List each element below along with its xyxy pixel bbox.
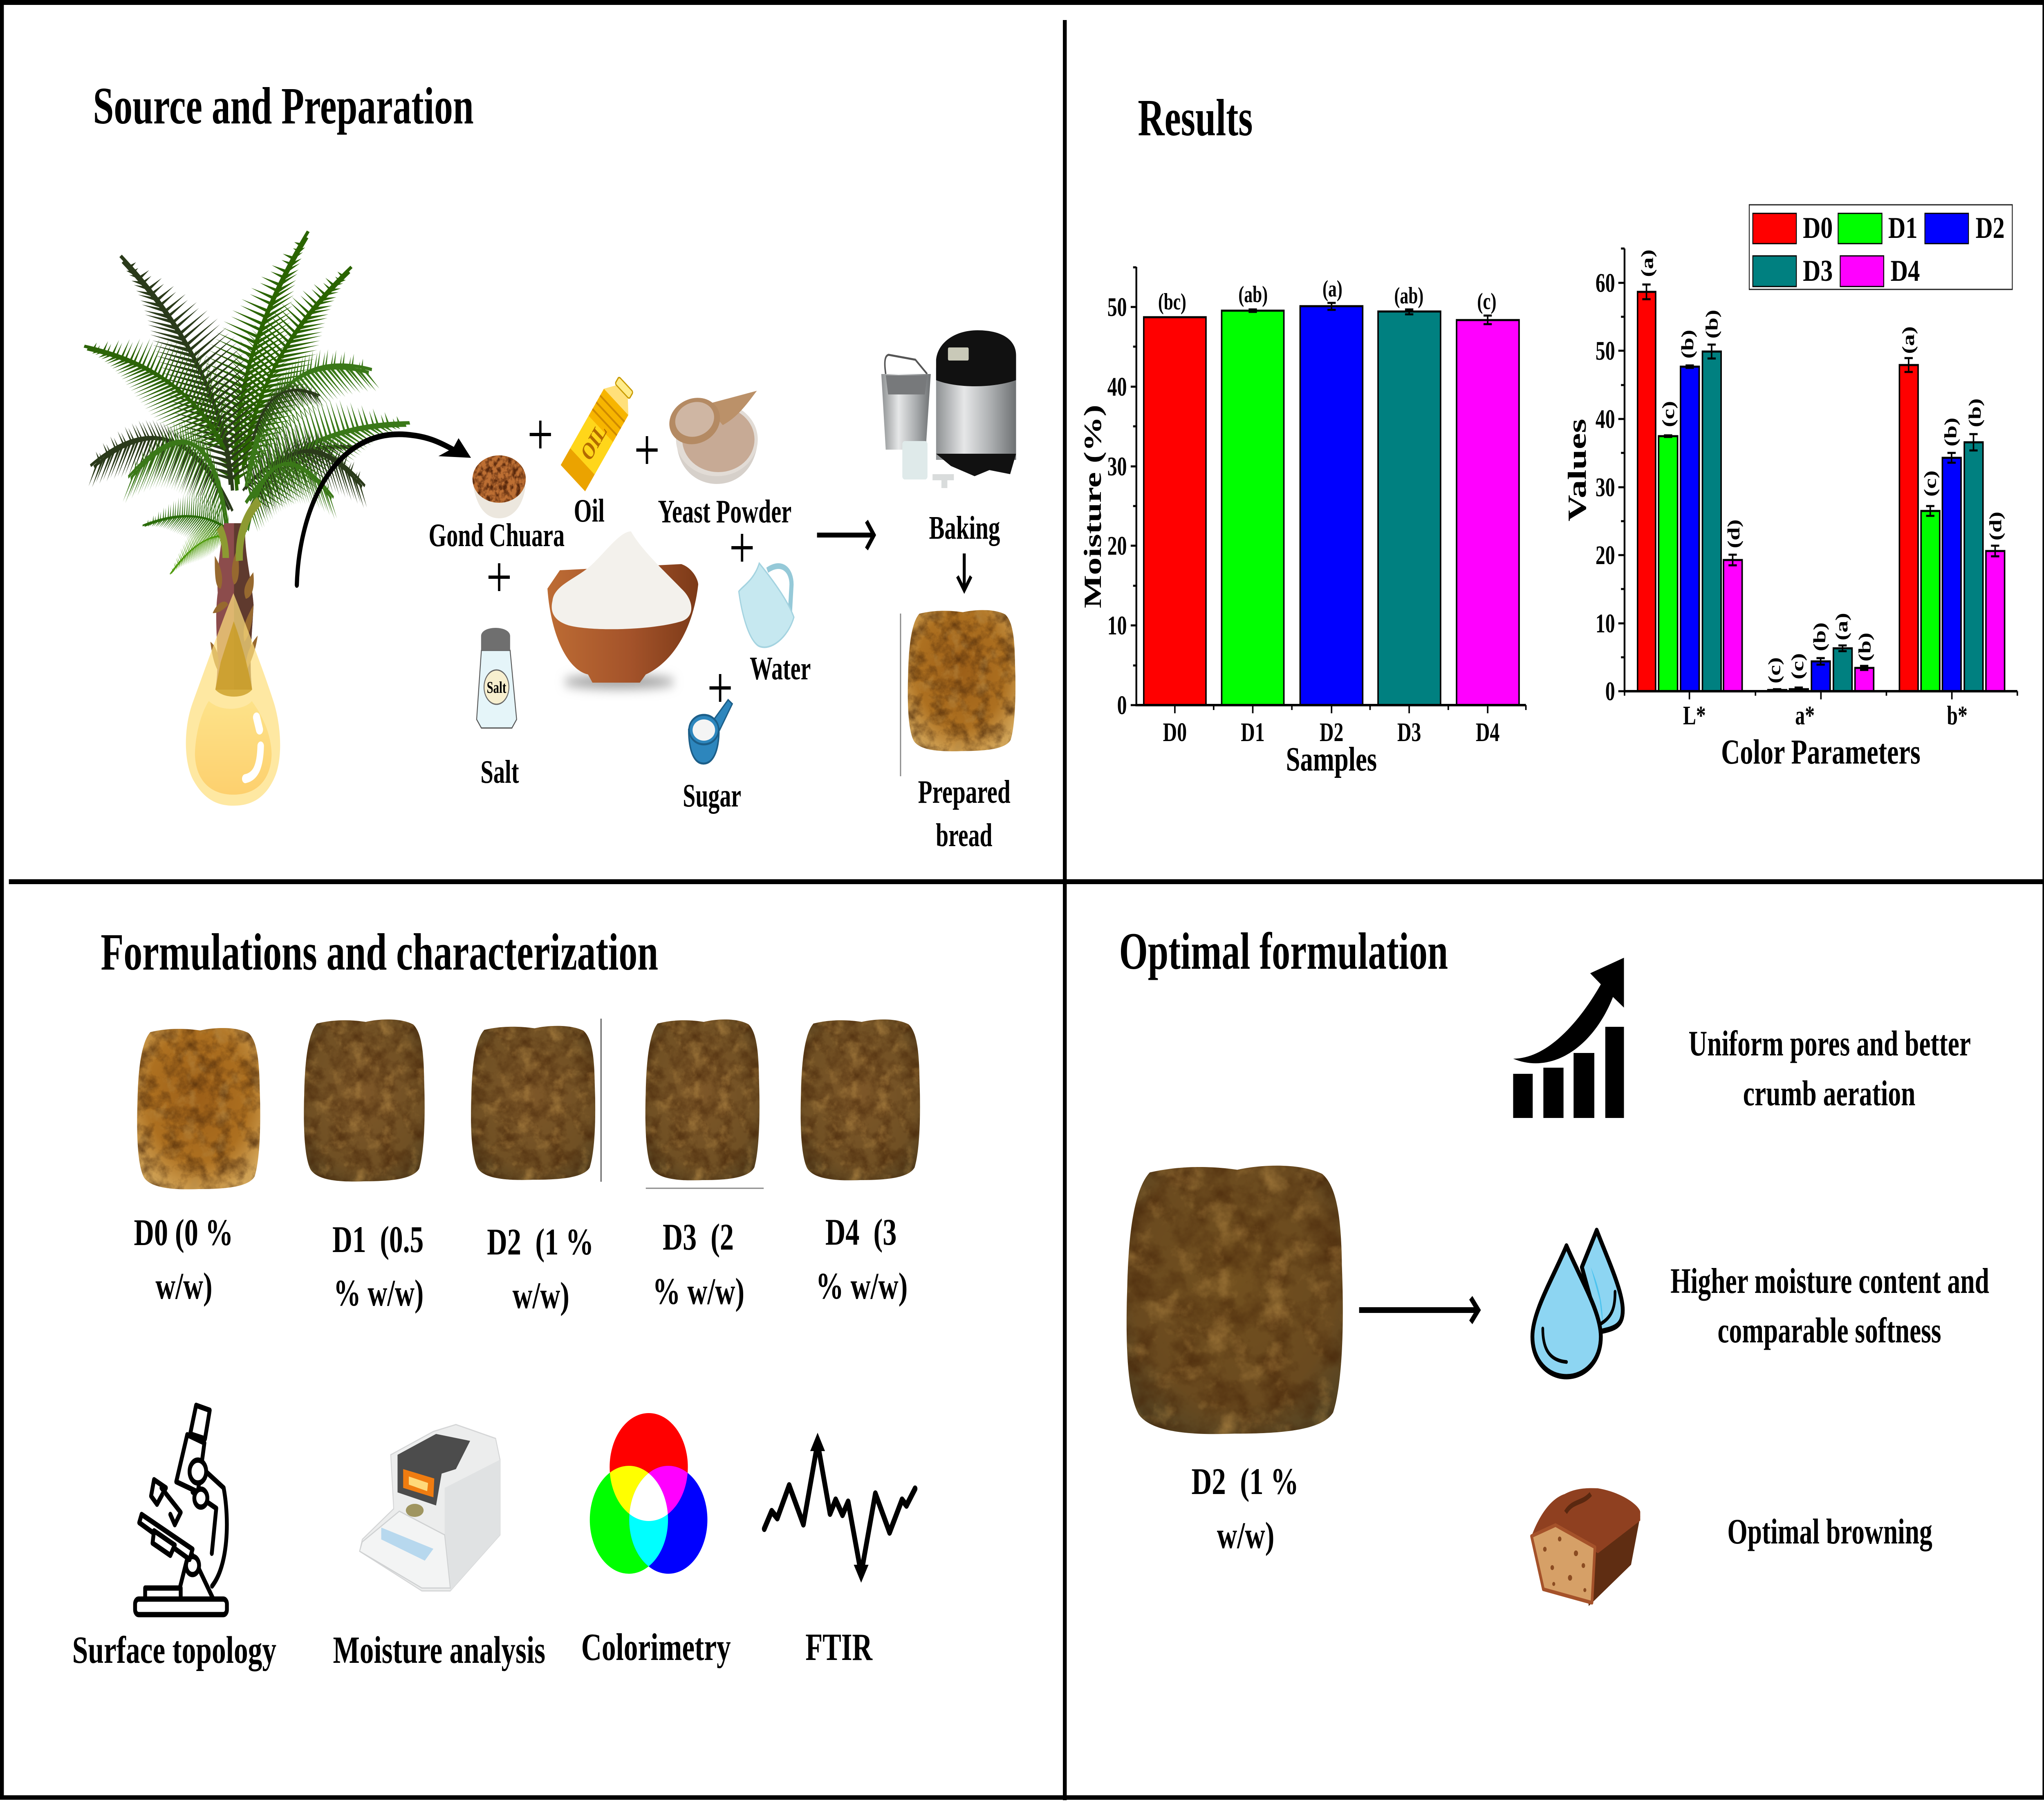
icon: microscope [135,1405,227,1615]
label: salt: Salt [480,754,519,790]
label: prepared: Prepared [918,774,1011,810]
label: D1: D1 (0.5 [332,1219,424,1261]
icon: plus [530,421,551,448]
bar chart: moisture: Moisture (%) [1079,405,1106,608]
legend: D0 [1803,211,1833,244]
icon: bread machine [881,330,1016,488]
label: D4: % w/w) [816,1266,908,1307]
bar chart: moisture: 30 [1107,452,1127,482]
text: uniform pores: Uniform pores and better [1688,1024,1971,1063]
icon: salt shaker [477,628,517,728]
icon: plus [710,674,731,702]
arrow: ingredients to baking [817,521,874,549]
arrow: baking to bread [957,553,971,590]
bar chart: moisture: (bc) [1158,289,1186,315]
bar chart: color parameters: 30 [1596,473,1615,502]
label: D3: % w/w) [652,1271,744,1313]
label: D2 [487,1221,594,1317]
bar chart: color parameters: L* [1683,701,1706,730]
bar chart: moisture: 0 [1117,691,1127,720]
label: D4: D4 (3 [825,1212,896,1253]
icon: yeast powder bowl [667,391,758,484]
bar chart: color parameters: 50 [1596,336,1615,366]
image: bread D2 [471,1026,595,1180]
panel: results [1079,89,2017,778]
bar chart: moisture: D2 [1320,718,1343,747]
label: D1: % w/w) [334,1272,424,1314]
icon: plus [731,534,753,562]
text: optimal browning: Optimal browning [1727,1512,1932,1551]
icon: bread loaf [1531,1488,1640,1606]
icon: rising bar chart [1513,958,1624,1118]
label: D2 optimal: D2 (1 % [1191,1461,1299,1503]
text: higher moisture [1670,1261,1989,1350]
bar chart: color parameters: 20 [1596,541,1615,570]
label: water: Water [750,651,811,687]
bar chart: color parameters: (c) [1921,470,1940,497]
bar chart: moisture [1079,267,1526,778]
image: bread D0 [137,1028,260,1189]
image: bread D1 [304,1019,425,1182]
panel: source and preparation [84,77,1016,853]
bar chart: color parameters: (d) [1724,520,1743,548]
legend: D2 [1976,211,2005,244]
bar chart: moisture: D1 [1241,718,1265,747]
bar chart: color parameters: (a) [1638,249,1657,277]
text: higher moisture: Higher moisture content and [1670,1261,1989,1301]
bar chart: color parameters: b* [1947,701,1968,730]
icon: oil bottle [561,371,638,491]
label: yeast powder: Yeast Powder [658,494,791,530]
label: colorimetry: Colorimetry [581,1626,731,1669]
heading: formulations and characterization: Formulations and characterization [101,923,658,981]
label: D2: w/w) [513,1275,569,1317]
icon: moisture analyzer [360,1425,500,1591]
label: surface topology: Surface topology [72,1629,276,1671]
bar chart: moisture: (ab) [1394,283,1423,309]
heading: source and preparation: Source and Preparation [93,77,474,135]
icon: FTIR spectrum [764,1433,915,1583]
label: D3 [652,1216,744,1313]
label: D0 [134,1212,233,1307]
heading: results: Results [1138,89,1253,147]
icon: water drops [1533,1230,1623,1377]
label: D0: w/w) [155,1266,213,1307]
label: sugar: Sugar [683,778,741,814]
image: prepared bread [901,610,1015,776]
label: D3: D3 (2 [663,1216,734,1258]
icon: sugar scoop [689,700,732,764]
icon: plus [637,436,658,464]
panel: formulations and characterization [72,923,920,1671]
bar chart: moisture: (ab) [1238,282,1268,307]
arrow: bread to outcomes [1359,1298,1478,1322]
icon: gond chuara bowl [473,455,526,518]
legend: D1 [1888,211,1918,244]
label: FTIR: FTIR [805,1626,873,1669]
bar chart: color parameters: (a) [1899,326,1918,354]
label: D0: D0 (0 % [134,1212,233,1254]
bar chart: color parameters: (d) [1986,512,2005,540]
bar chart: moisture: 50 [1107,293,1127,322]
bar chart: color parameters: (b) [1966,399,1984,427]
icon: flour bowl [547,531,698,688]
bar chart: color parameters: a* [1795,701,1815,730]
text: uniform pores: crumb aeration [1743,1073,1916,1113]
bar chart: moisture: 10 [1107,611,1127,641]
arrow: palm to gum [297,434,471,585]
label: D4 [816,1212,908,1307]
bar chart: moisture: Samples [1286,740,1377,778]
bar chart: color parameters: (a) [1832,613,1851,641]
heading: optimal formulation: Optimal formulation [1119,923,1448,981]
label: D2 optimal [1191,1461,1299,1557]
legend: D4 [1891,254,1920,287]
icon: plus [489,563,510,591]
label: D1 [332,1219,424,1314]
image: bread D4 [801,1019,920,1181]
legend [1749,205,2012,289]
label: D2: D2 (1 % [487,1221,594,1263]
bar chart: moisture: (c) [1477,289,1497,314]
label: gond chuara: Gond Chuara [429,517,565,553]
bar chart: moisture: D0 [1163,718,1187,747]
bar chart: moisture: D4 [1476,718,1499,747]
bar chart: color parameters: (b) [1855,633,1874,661]
panel: optimal formulation [1119,923,1989,1606]
bar chart: color parameters: 0 [1605,677,1615,706]
bar chart: moisture: 40 [1107,372,1127,402]
text: higher moisture: comparable softness [1717,1310,1941,1350]
bar chart: color parameters: 40 [1596,405,1615,434]
icon: RGB color circles [590,1413,707,1574]
icon: oil bottle: OIL [577,417,611,466]
bar chart: moisture: 20 [1107,531,1127,561]
label: oil: Oil [574,493,605,529]
bar chart: color parameters: (c) [1765,657,1784,683]
image: bread D3 [645,1019,760,1181]
icon: water jug [739,563,794,647]
bar chart: color parameters [1563,205,2017,771]
bar chart: color parameters: 60 [1596,269,1615,298]
label: D2 optimal: w/w) [1217,1515,1274,1557]
bar chart: color parameters: (c) [1788,653,1807,679]
bar chart: color parameters: (b) [1678,330,1697,358]
label: moisture analysis: Moisture analysis [333,1629,545,1671]
legend: D3 [1803,254,1833,287]
image: bread D2 large [1127,1166,1343,1434]
label: bread: bread [936,818,993,853]
bar chart: color parameters: (b) [1810,623,1829,651]
bar chart: moisture: D3 [1397,718,1421,747]
bar chart: moisture: (a) [1322,276,1342,302]
bar chart: color parameters: 10 [1596,609,1615,638]
label: baking: Baking [929,510,1000,546]
icon: salt shaker: Salt [487,679,507,697]
icon: palm tree with oil drop [84,231,410,806]
text: uniform pores [1688,1024,1971,1113]
bar chart: color parameters: (b) [1941,418,1960,446]
bar chart: color parameters: (c) [1659,401,1678,427]
bar chart: color parameters: Color Parameters [1721,732,1921,771]
bar chart: color parameters: (b) [1702,310,1721,338]
bar chart: color parameters: Values [1563,419,1591,522]
